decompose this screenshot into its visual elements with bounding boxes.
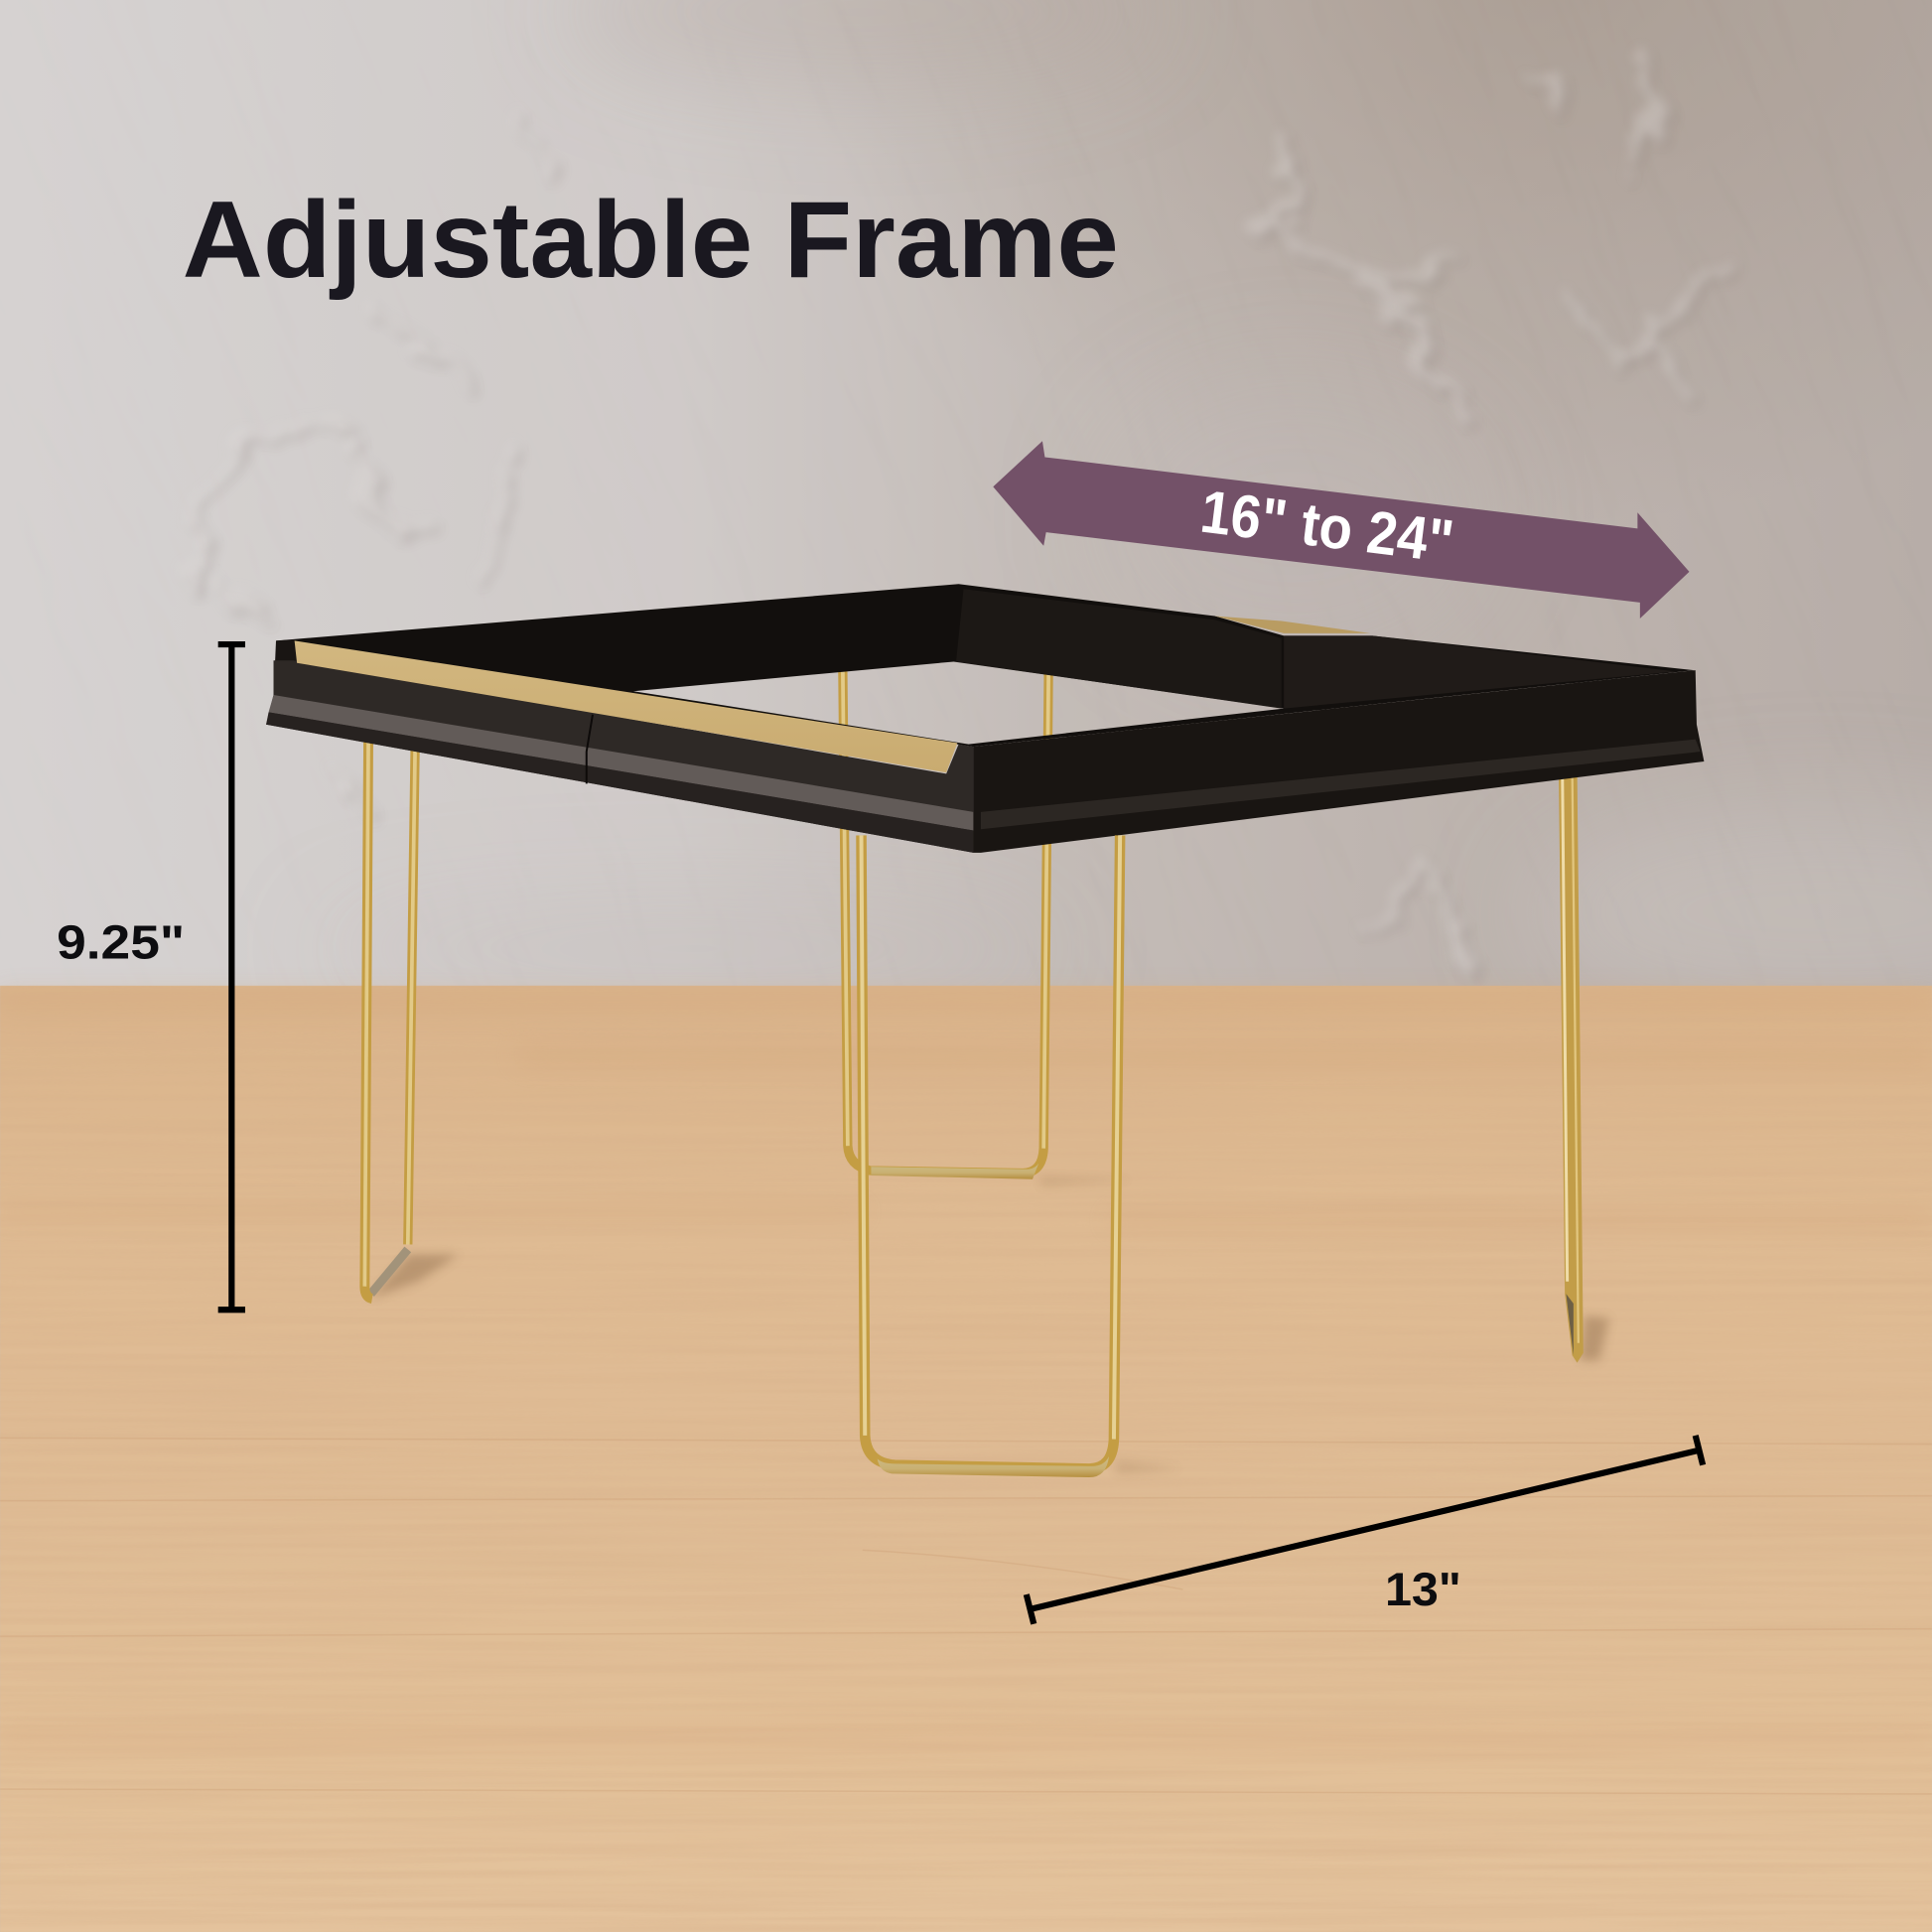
depth dimension line [1027, 1436, 1703, 1624]
product: adjustable frame [266, 584, 1704, 853]
right wire leg [1559, 770, 1584, 1363]
front-left outer face [266, 660, 973, 853]
background: plaster wall [0, 0, 1932, 986]
right highlight band [981, 740, 1701, 829]
height dimension line [218, 644, 245, 1310]
right-rear inner panel [956, 589, 1282, 709]
frame inner faces with opening [276, 584, 1694, 747]
front-left highlight band [269, 695, 973, 830]
gold strip on left rail [295, 640, 957, 772]
seam in left rail [587, 715, 593, 783]
right outer face [973, 670, 1704, 853]
arrow shape [993, 441, 1690, 619]
front wire leg [862, 835, 1120, 1477]
leg shadows on table [369, 1177, 1609, 1473]
depth label: 13" [1385, 1563, 1461, 1615]
back wire leg [843, 671, 1048, 1179]
height label: 9.25" [57, 916, 185, 970]
title: Adjustable Frame [183, 180, 1119, 301]
background: wooden table surface [0, 986, 1932, 1932]
rear section after seam [1284, 635, 1676, 709]
left wire leg [364, 735, 415, 1299]
width arrow: 16 to 24 inches [993, 441, 1690, 619]
front-left lower edge [266, 712, 973, 853]
arrow label: 16" to 24" [1197, 478, 1457, 575]
gold rail on far side [1215, 617, 1370, 633]
front-left corner cap [274, 639, 298, 697]
